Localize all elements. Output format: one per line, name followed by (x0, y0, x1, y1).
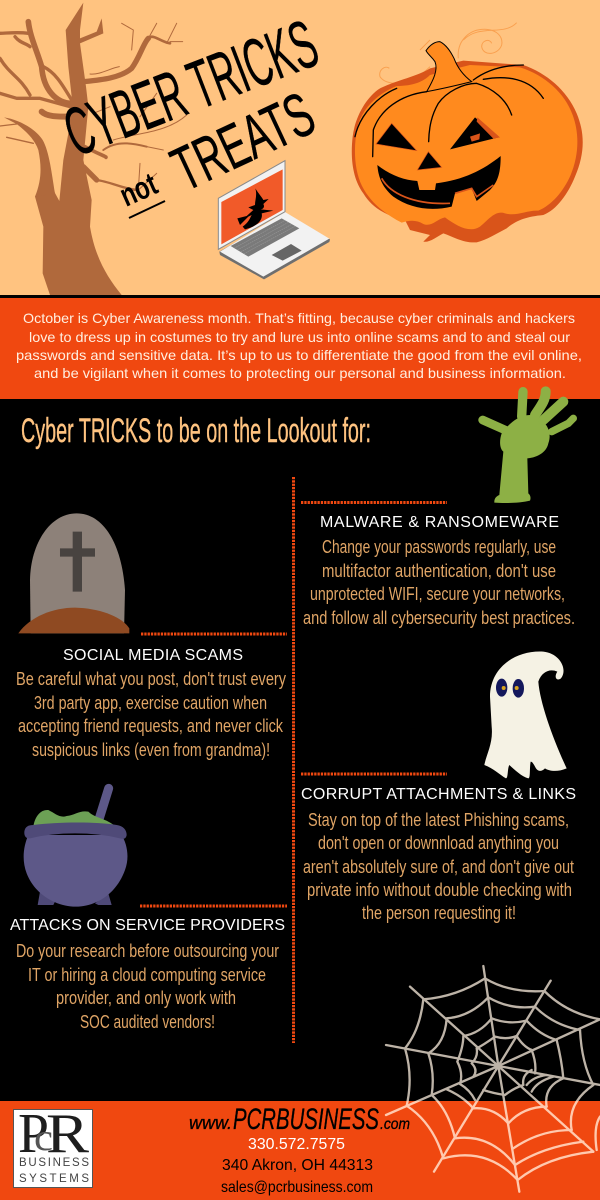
logo: pcr business systems: c (34, 1117, 53, 1159)
page black background (0, 295, 600, 1101)
intro text: and be vigilant when it comes to protecting our personal and business information. (34, 365, 566, 381)
pumpkin left eye (376, 123, 417, 151)
text: social media tips: suspicious links (even from grandma)! (32, 740, 270, 760)
icon: spider web (386, 966, 600, 1192)
pumpkin right eye (450, 117, 498, 149)
heading: attacks on service providers: ATTACKS ON SERVICE PROVIDERS (10, 917, 285, 934)
logo: pcr business systems: P (18, 1103, 49, 1165)
panel: attacks on service providers (10, 906, 287, 1032)
text: social media tips: accepting friend requests, and never click (18, 716, 284, 736)
website url: .com (380, 1116, 410, 1133)
pumpkin contour lines (355, 65, 543, 157)
title word: not: not (114, 165, 163, 213)
title: cyber tricks not treats (54, 5, 328, 218)
trackpad (272, 244, 302, 261)
pumpkin nose (417, 152, 442, 170)
text: corrupt attachments tips (303, 810, 574, 923)
icon: tombstone (18, 513, 129, 633)
heading: corrupt attachments: CORRUPT ATTACHMENTS & LINKS (301, 786, 576, 803)
intro text (16, 310, 582, 381)
icon: laptop with witch (218, 161, 330, 279)
pumpkin body (355, 65, 577, 229)
pumpkin stem (426, 42, 472, 92)
logo: pcr business systems: BUSINESS (19, 1157, 89, 1169)
address: 340 Akron, OH 44313 (222, 1157, 373, 1174)
intro text: October is Cyber Awareness month. That’s fitting, because cyber criminals and hackers (23, 310, 575, 326)
intro text: love to dress up in costumes to try and lure us into online scams and to and steal our (29, 329, 570, 345)
phone number: 330.572.7575 (248, 1136, 345, 1153)
text: corrupt attachments tips: the person requesting it! (362, 903, 516, 923)
header background (0, 0, 600, 296)
panel: footer (0, 1101, 600, 1200)
pumpkin (352, 23, 583, 242)
text: social media tips: 3rd party app, exercise caution when (34, 693, 267, 713)
pumpkin vines (380, 23, 517, 83)
heading: malware: MALWARE & RANSOMEWARE (320, 514, 559, 531)
website url: PCRBUSINESS (233, 1103, 379, 1136)
title line: treats: TREATS (162, 80, 325, 205)
witch silhouette (237, 188, 273, 229)
pumpkin mouth (377, 156, 501, 209)
icon: ghost (484, 652, 567, 778)
text: malware tips: multifactor authentication, don't use (322, 561, 556, 581)
text: malware tips (303, 537, 575, 628)
heading: social media scams: SOCIAL MEDIA SCAMS (63, 647, 243, 664)
text: social media tips (16, 669, 286, 760)
panel: social media scams (16, 634, 287, 760)
text: service provider tips: Do your research before outsourcing your (16, 941, 279, 961)
text: service provider tips: SOC audited vendors! (80, 1012, 215, 1032)
bare tree (0, 3, 187, 295)
logo: pcr business systems: R (46, 1103, 90, 1165)
panel: malware and ransomeware (301, 502, 575, 628)
dotted vertical divider (292, 477, 295, 1043)
logo: pcr business systems: SYSTEMS (19, 1173, 89, 1185)
icon: cauldron (24, 788, 127, 907)
email: sales@pcrbusiness.com (221, 1179, 373, 1196)
text: service provider tips: provider, and only work with (56, 988, 236, 1008)
logo: pcr business systems (14, 1103, 92, 1188)
website url (189, 1103, 410, 1136)
pumpkin outline (352, 61, 583, 242)
text: service provider tips (16, 941, 279, 1032)
website url: www. (189, 1113, 232, 1133)
intro text: passwords and sensitive data. It’s up to us to differentiate the good from the evil online, (16, 347, 582, 363)
text: service provider tips: IT or hiring a cloud computing service (28, 965, 266, 985)
keyboard (231, 218, 299, 257)
icon: zombie hand (483, 391, 573, 503)
panel: intro banner (0, 298, 600, 399)
text: social media tips: Be careful what you post, don't trust every (16, 669, 286, 689)
panel: corrupt attachments and links (301, 774, 576, 923)
